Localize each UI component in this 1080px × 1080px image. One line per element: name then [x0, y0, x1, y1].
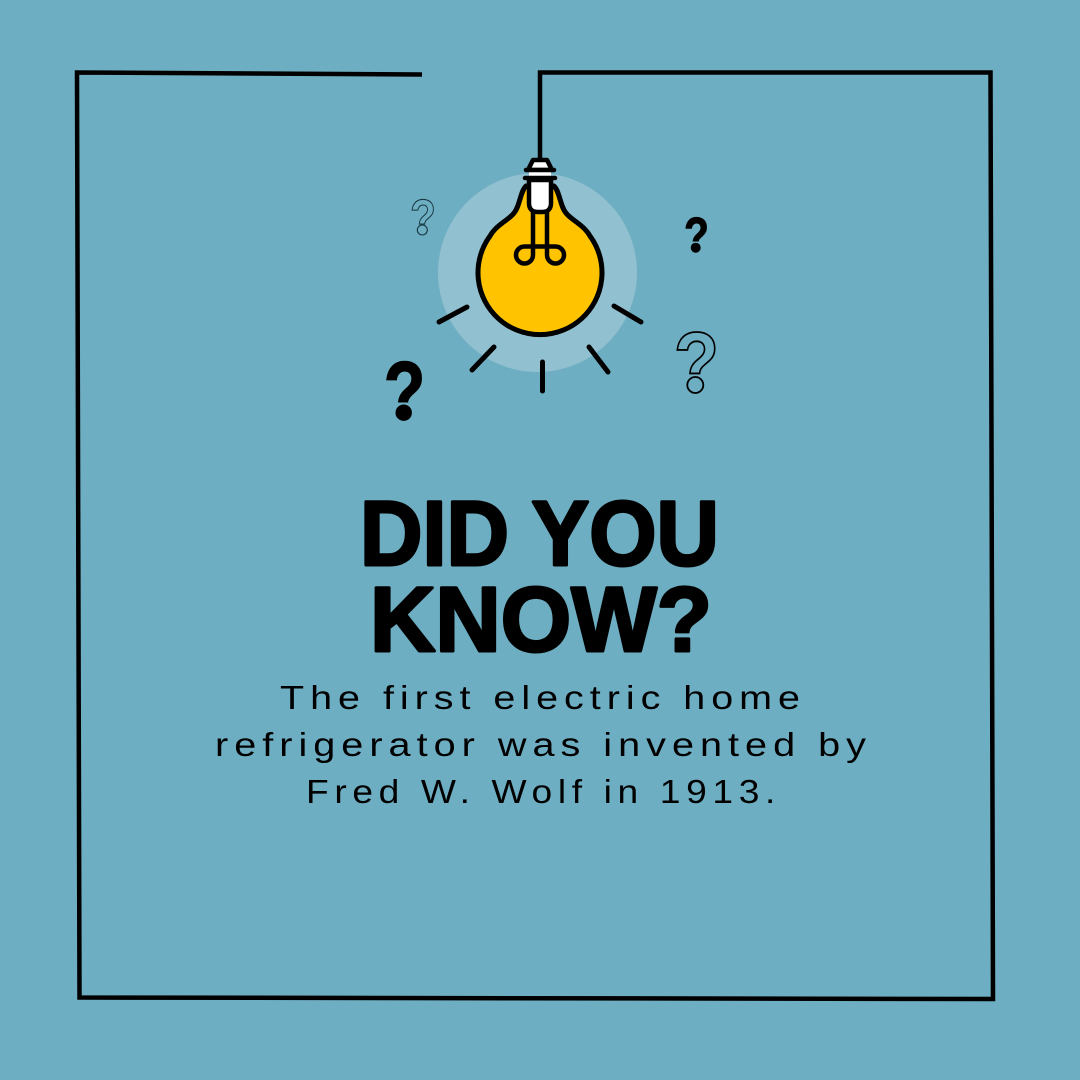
icon: outline question mark small: ? [410, 189, 436, 245]
icon: outline question mark large: ? [674, 315, 719, 409]
fact text: refrigerator was invented by [215, 726, 872, 763]
icon: bold question mark large: ? [384, 345, 425, 440]
icon: outline question mark large [676, 331, 716, 394]
icon: light rays [439, 306, 641, 391]
frame with cord [77, 72, 993, 999]
filament [516, 210, 564, 264]
icon: bold question mark small [685, 216, 707, 253]
fact text: Fred W. Wolf in 1913. [306, 773, 781, 810]
title: KNOW? [370, 569, 712, 671]
icon: light bulb [438, 160, 637, 372]
icon: bold question mark large [386, 360, 422, 421]
socket [525, 160, 555, 212]
fact text [215, 679, 872, 810]
title: DID YOU [360, 483, 719, 585]
fact text: The first electric home [280, 679, 806, 716]
bulb glass [478, 186, 602, 335]
icon: outline question mark small [412, 198, 434, 236]
icon: bold question mark small: ? [684, 207, 709, 264]
title [360, 483, 719, 671]
